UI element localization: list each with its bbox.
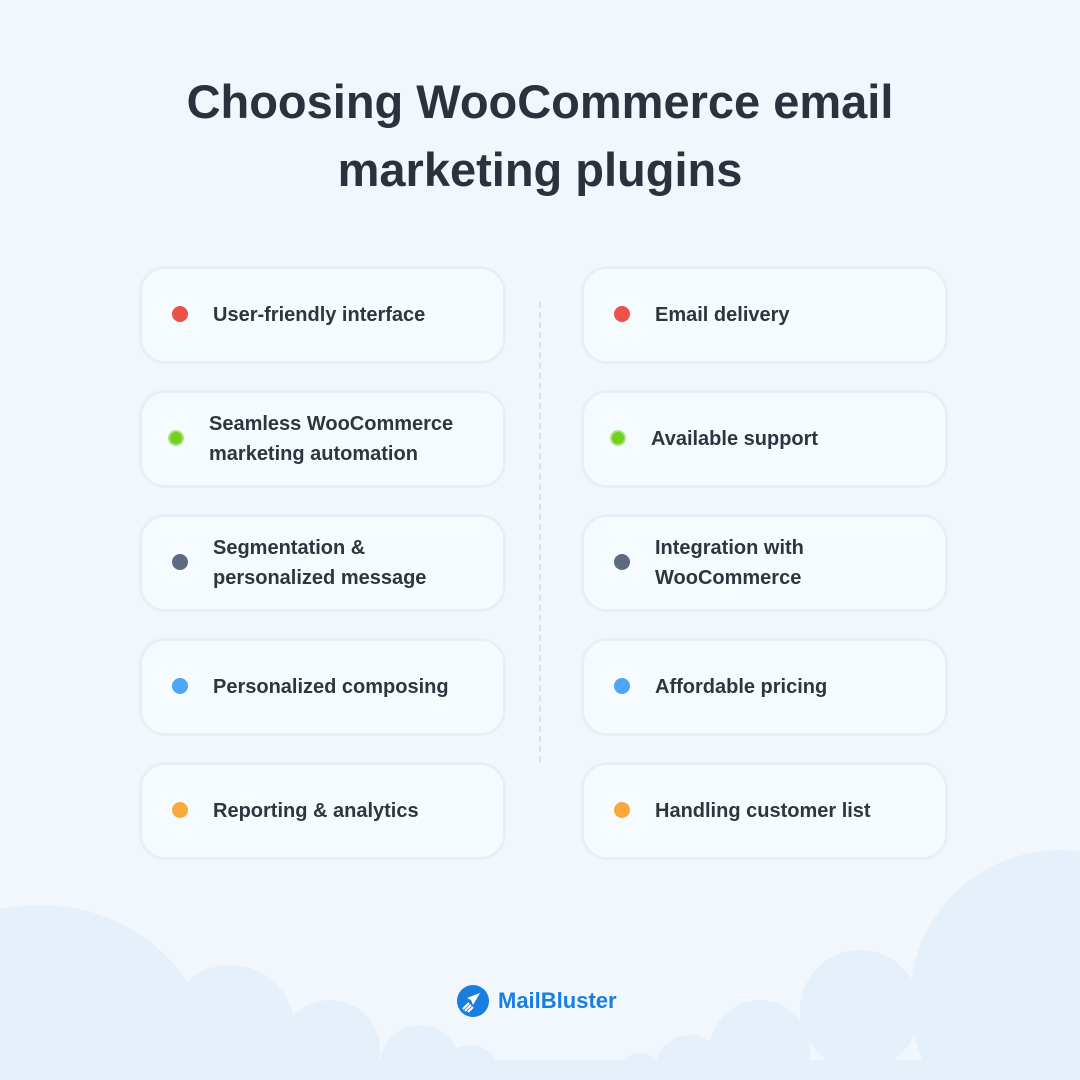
card: Reporting & analytics: Reporting & analytics bbox=[213, 800, 419, 822]
card: Segmentation: personalized message bbox=[213, 567, 426, 589]
card: Segmentation bbox=[139, 514, 506, 612]
card: Email delivery bbox=[581, 266, 948, 364]
card: Affordable pricing: Affordable pricing bbox=[655, 676, 827, 698]
card: Available support bbox=[581, 390, 948, 488]
title bbox=[187, 75, 893, 196]
card: User-friendly interface: User-friendly interface bbox=[213, 304, 425, 326]
card: Personalized composing: Personalized composing bbox=[213, 676, 449, 698]
card: Email delivery: Email delivery bbox=[655, 304, 790, 326]
card: Affordable pricing bbox=[581, 638, 948, 736]
card: Handling customer list bbox=[581, 762, 948, 860]
logo: MailBluster: MailBluster bbox=[498, 988, 617, 1013]
logo: MailBluster bbox=[457, 985, 617, 1017]
title: Choosing WooCommerce email bbox=[187, 75, 893, 128]
card: Seamless WooCommerce marketing automation bbox=[139, 390, 506, 488]
card: Available support: Available support bbox=[651, 428, 818, 450]
card: Integration with WooCommerce: WooCommerce bbox=[655, 567, 801, 589]
title: marketing plugins bbox=[338, 143, 742, 196]
card: Seamless WooCommerce marketing automation: marketing automation bbox=[209, 443, 418, 465]
icon: logo bbox=[457, 985, 489, 1017]
card: Handling customer list: Handling customer list bbox=[655, 800, 871, 822]
card: User-friendly interface bbox=[139, 266, 506, 364]
card: Seamless WooCommerce marketing automation: Seamless WooCommerce bbox=[209, 413, 453, 435]
card: Integration with WooCommerce: Integration with bbox=[655, 537, 804, 559]
card: Personalized composing bbox=[139, 638, 506, 736]
card: Segmentation: Segmentation & bbox=[213, 537, 365, 559]
card: Reporting & analytics bbox=[139, 762, 506, 860]
card: Integration with WooCommerce bbox=[581, 514, 948, 612]
divider bbox=[539, 302, 541, 762]
